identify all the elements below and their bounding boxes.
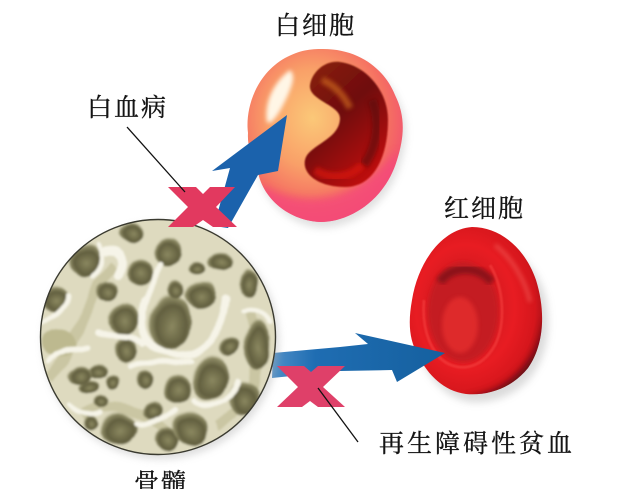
white blood cell <box>247 49 406 230</box>
arrow: bone marrow to white blood cell <box>212 115 287 228</box>
cell nucleus <box>305 62 388 187</box>
porous bone texture <box>42 222 274 453</box>
red blood cell <box>410 227 560 410</box>
label: white blood cell: 白细胞 <box>275 12 356 40</box>
arrow: bone marrow to red blood cell <box>272 333 445 382</box>
X mark: white blood cell path <box>168 187 237 227</box>
label: red blood cell: 红细胞 <box>444 195 525 223</box>
label: aplastic anemia: 再生障碍性贫血 <box>379 430 575 458</box>
leader line: aplastic anemia <box>318 388 358 442</box>
label: leukemia: 白血病 <box>87 94 168 122</box>
X mark: red blood cell path <box>277 366 345 407</box>
bone marrow sphere <box>40 218 282 462</box>
leader line: leukemia <box>127 127 185 192</box>
